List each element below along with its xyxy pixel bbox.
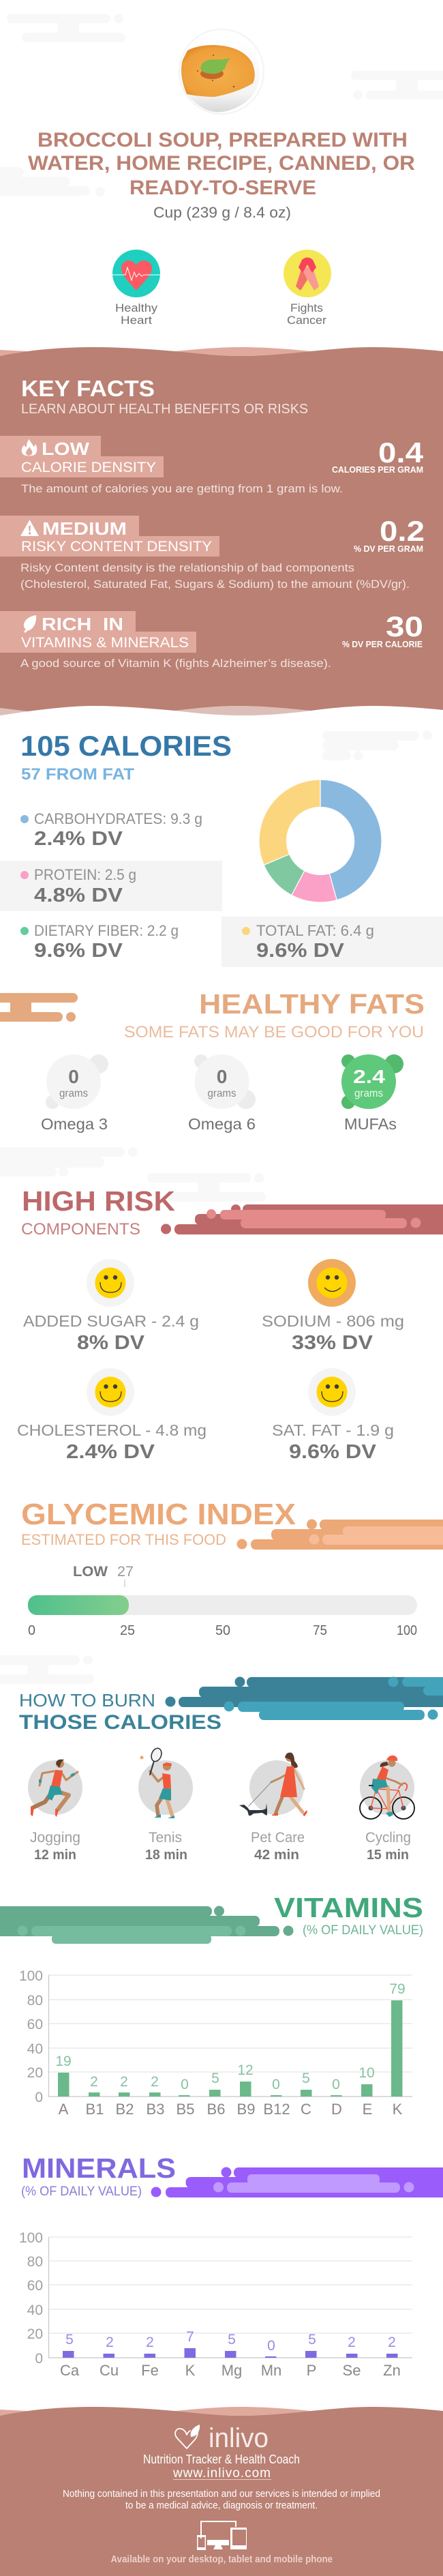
- gauge: glycemic index: LOW: [73, 1564, 108, 1580]
- risk: sodium: 33% DV: [292, 1332, 373, 1354]
- bar chart: vitamins: 100: [19, 1968, 43, 1984]
- activity: tennis: [138, 1747, 193, 1818]
- label: jogging: Jogging: [30, 1830, 80, 1846]
- label: tenis: Tenis: [149, 1830, 182, 1846]
- fat: mufas: MUFAs: [344, 1115, 397, 1133]
- icon: devices: [197, 2521, 247, 2550]
- bar chart: minerals: Mg: [222, 2362, 242, 2379]
- bar chart: vitamins: K: [393, 2101, 403, 2118]
- activity: cycling: [360, 1756, 414, 1819]
- icon: flame: [22, 439, 37, 456]
- fat: mufas: grams: [354, 1088, 383, 1099]
- bar chart: vitamins: 80: [27, 1993, 43, 2009]
- label: cycling: Cycling: [365, 1830, 411, 1846]
- heading: calories: 105 CALORIES: [20, 730, 232, 762]
- heading: minerals: MINERALS: [22, 2152, 176, 2184]
- gauge: glycemic index: 100: [397, 1623, 417, 1638]
- bar chart: minerals: 2: [388, 2335, 396, 2350]
- fact: calorie density: [0, 436, 424, 495]
- disclaimer: Nothing contained in this presentation and our services is intended or implied: [63, 2488, 380, 2500]
- bar chart: vitamins: 0: [35, 2090, 43, 2105]
- heading: high risk: HIGH RISK: [22, 1185, 175, 1217]
- gauge: glycemic index: 27: [117, 1564, 134, 1580]
- legend: carbohydrates: [20, 810, 202, 850]
- subheading: estimated for this food: ESTIMATED FOR THIS FOOD: [21, 1531, 226, 1548]
- availability note: Available on your desktop, tablet and mobile phone: [110, 2553, 333, 2565]
- cloud: vitamins: [0, 1906, 293, 1944]
- legend: carbohydrates: CARBOHYDRATES: 9.3 g: [34, 810, 202, 827]
- icon: fights cancer ribbon: [284, 250, 331, 297]
- fat: omega 3: grams: [59, 1088, 88, 1099]
- bar chart: minerals: 2: [348, 2335, 356, 2350]
- bar chart: minerals: P: [307, 2362, 316, 2379]
- bar chart: vitamins: 79: [389, 1981, 406, 1997]
- bar chart: vitamins: B3: [147, 2101, 164, 2118]
- fat: omega 6: 0: [217, 1066, 227, 1087]
- subheading: minerals percent of daily value: (% OF DAILY VALUE): [21, 2185, 142, 2199]
- bar chart: vitamins: C: [301, 2101, 311, 2118]
- risk: added sugar: ADDED SUGAR - 2.4 g: [23, 1312, 199, 1330]
- bar chart: vitamins: 12: [237, 2062, 254, 2078]
- risk: added sugar: 8% DV: [77, 1332, 145, 1354]
- label: tenis: 18 min: [145, 1848, 187, 1863]
- bar chart: vitamins: 0: [332, 2077, 340, 2092]
- fact: rich in vitamins and minerals: [0, 610, 423, 670]
- bar chart: minerals: Fe: [141, 2362, 159, 2379]
- bar chart: vitamins: 2: [90, 2074, 98, 2090]
- legend: protein: 4.8% DV: [34, 885, 123, 906]
- activity: jogging: [28, 1760, 82, 1817]
- bar chart: vitamins: 5: [302, 2071, 310, 2086]
- icon: leaf: [24, 615, 36, 633]
- title: [28, 129, 415, 199]
- fat: omega 6: [188, 1054, 256, 1133]
- bar chart: vitamins: B6: [207, 2101, 225, 2118]
- fact: risky content density: % DV PER GRAM: [354, 544, 423, 554]
- label: fights cancer: [287, 301, 326, 327]
- fact: risky content density: 0.2: [380, 515, 425, 547]
- bar chart: vitamins: 60: [27, 2017, 43, 2032]
- heading: healthy fats: HEALTHY FATS: [199, 988, 425, 1020]
- label: tenis: [145, 1830, 187, 1863]
- risk: saturated fat: SAT. FAT - 1.9 g: [272, 1421, 394, 1439]
- disclaimer: to be a medical advice, diagnosis or treatment.: [125, 2500, 318, 2511]
- bar chart: vitamins: D: [331, 2101, 342, 2118]
- bar chart: vitamins: B2: [116, 2101, 134, 2118]
- bar chart: vitamins: B1: [86, 2101, 104, 2118]
- legend: total fat: 9.6% DV: [256, 940, 345, 962]
- bar chart: minerals: Cu: [100, 2362, 119, 2379]
- panel: key facts: [0, 347, 443, 715]
- bar chart: minerals: 80: [27, 2254, 43, 2270]
- gauge: glycemic index: 25: [120, 1623, 135, 1638]
- subheading: healthy fats: SOME FATS MAY BE GOOD FOR YOU: [124, 1023, 424, 1041]
- website link: www.inlivo.com: [172, 2466, 271, 2481]
- legend: protein: [0, 861, 222, 911]
- bar chart: vitamins: 10: [358, 2065, 375, 2081]
- heading: glycemic index: GLYCEMIC INDEX: [21, 1498, 296, 1531]
- label: healthy heart: Heart: [121, 314, 152, 327]
- fat: omega 3: [41, 1054, 108, 1133]
- bar chart: vitamins: A: [59, 2101, 69, 2118]
- fact: rich in vitamins and minerals: VITAMINS & MINERALS: [21, 635, 189, 651]
- legend: dietary fiber: DIETARY FIBER: 2.2 g: [34, 922, 179, 939]
- icon: healthy heart: [112, 250, 160, 297]
- fat: omega 3: Omega 3: [41, 1115, 108, 1133]
- food image: bowl of soup: [179, 29, 264, 114]
- bar chart: minerals: K: [185, 2362, 196, 2379]
- fat: omega 3: 0: [68, 1066, 79, 1087]
- subheading: components: COMPONENTS: [21, 1220, 140, 1239]
- risk: sodium: [262, 1259, 404, 1354]
- fact: rich in vitamins and minerals: A good source of Vitamin K (fights Alzheimer’s disease).: [20, 657, 331, 670]
- label: jogging: [30, 1830, 80, 1863]
- bar chart: minerals: Zn: [383, 2362, 401, 2379]
- title: WATER, HOME RECIPE, CANNED, OR: [28, 152, 415, 175]
- logo: inlivo: inlivo: [209, 2423, 269, 2453]
- fact: risky content density: (Cholesterol, Saturated Fat, Sugars & Sodium) to the amount (%DV/gr).: [20, 578, 410, 591]
- fact: risky content density: Risky Content density is the relationship of bad components: [20, 561, 354, 574]
- bar chart: minerals: 20: [27, 2326, 43, 2342]
- gauge: glycemic index: [28, 1564, 417, 1638]
- label: jogging: 12 min: [34, 1848, 76, 1863]
- bar chart: vitamins: 20: [27, 2065, 43, 2081]
- heading: how to burn those calories: [19, 1690, 222, 1734]
- cloud: glycemic index: [237, 1520, 443, 1550]
- risk: cholesterol: [17, 1368, 207, 1463]
- risk: cholesterol: CHOLESTEROL - 4.8 mg: [17, 1421, 207, 1439]
- serving size: Cup (239 g / 8.4 oz): [153, 204, 291, 221]
- label: pet care: [251, 1830, 305, 1863]
- fact: rich in vitamins and minerals: 30: [386, 610, 423, 642]
- legend: dietary fiber: 9.6% DV: [34, 940, 123, 962]
- cloud: how to burn: [165, 1676, 443, 1720]
- donut chart: macronutrients: [259, 780, 382, 902]
- fat: omega 6: Omega 6: [188, 1115, 256, 1133]
- bar chart: minerals: 5: [228, 2332, 236, 2348]
- bar chart: minerals: 5: [308, 2332, 316, 2348]
- tagline: Nutrition Tracker & Health Coach: [143, 2453, 300, 2466]
- bar chart: vitamins: 0: [272, 2077, 280, 2092]
- heading: how to burn those calories: HOW TO BURN: [19, 1690, 155, 1711]
- risk: cholesterol: 2.4% DV: [66, 1441, 155, 1463]
- bar chart: minerals: 2: [106, 2335, 114, 2350]
- bar chart: minerals: 5: [65, 2332, 74, 2348]
- legend: total fat: TOTAL FAT: 6.4 g: [256, 922, 374, 939]
- bar chart: vitamins: B9: [237, 2101, 255, 2118]
- label: cycling: 15 min: [367, 1848, 409, 1863]
- fact: calorie density: CALORIES PER GRAM: [332, 464, 423, 475]
- heading: vitamins: VITAMINS: [274, 1892, 423, 1923]
- bar chart: vitamins: B5: [177, 2101, 194, 2118]
- bar chart: vitamins: B12: [263, 2101, 290, 2118]
- fact: calorie density: CALORIE DENSITY: [21, 460, 156, 475]
- bar chart: minerals: 7: [186, 2329, 194, 2345]
- legend: total fat: [222, 917, 443, 967]
- bar chart: vitamins: 2: [120, 2074, 128, 2090]
- label: cycling: [365, 1830, 411, 1863]
- subheading: key facts: LEARN ABOUT HEALTH BENEFITS OR RISKS: [21, 401, 308, 417]
- activity: pet care: [239, 1753, 307, 1816]
- label: fights cancer: Fights: [290, 301, 323, 314]
- bar chart: minerals: Ca: [60, 2362, 80, 2379]
- legend: dietary fiber: [20, 922, 179, 962]
- label: pet care: Pet Care: [251, 1830, 305, 1846]
- risk: saturated fat: [272, 1368, 394, 1463]
- fact: calorie density: The amount of calories you are getting from 1 gram is low.: [21, 482, 343, 495]
- fat: mufas: 2.4: [353, 1066, 385, 1087]
- title: BROCCOLI SOUP, PREPARED WITH: [37, 129, 408, 151]
- gauge: glycemic index: 50: [215, 1623, 230, 1638]
- bar chart: vitamins: 19: [55, 2054, 72, 2069]
- risk: added sugar: [23, 1259, 199, 1354]
- label: fights cancer: Cancer: [287, 314, 326, 327]
- icon: warning: [20, 520, 39, 536]
- title: READY-TO-SERVE: [129, 177, 316, 199]
- heading: how to burn those calories: THOSE CALORIES: [19, 1711, 222, 1734]
- gauge: glycemic index: 75: [313, 1623, 327, 1638]
- bar chart: vitamins: 2: [151, 2074, 159, 2090]
- bar chart: vitamins: 40: [27, 2041, 43, 2057]
- cloud: healthy fats: [0, 993, 78, 1022]
- fact: rich in vitamins and minerals: RICH IN: [42, 614, 123, 634]
- label: healthy heart: Healthy: [115, 301, 158, 314]
- bar chart: minerals: 40: [27, 2303, 43, 2318]
- bar chart: vitamins: [19, 1968, 412, 2118]
- cloud: high risk: [161, 1204, 443, 1234]
- fact: rich in vitamins and minerals: % DV PER CALORIE: [342, 639, 423, 649]
- subheading: vitamins percent of daily value: (% OF DAILY VALUE): [303, 1923, 423, 1938]
- fat: mufas: [341, 1054, 403, 1133]
- fact: risky content density: RISKY CONTENT DENSITY: [21, 539, 212, 554]
- bar chart: vitamins: 5: [211, 2071, 219, 2086]
- panel: footer: [0, 2407, 443, 2576]
- fact: calorie density: 0.4: [378, 436, 424, 469]
- disclaimer: [63, 2488, 380, 2511]
- bar chart: minerals: 2: [146, 2335, 154, 2350]
- legend: protein: PROTEIN: 2.5 g: [34, 866, 136, 883]
- bar chart: minerals: Se: [343, 2362, 361, 2379]
- bar chart: minerals: 0: [267, 2338, 275, 2354]
- fact: calorie density: LOW: [42, 439, 90, 459]
- label: pet care: 42 min: [254, 1848, 299, 1863]
- risk: saturated fat: 9.6% DV: [289, 1441, 377, 1463]
- fat: omega 6: grams: [207, 1088, 236, 1099]
- bar chart: minerals: Mn: [261, 2362, 281, 2379]
- bar chart: vitamins: 0: [181, 2077, 189, 2092]
- bar chart: minerals: 60: [27, 2278, 43, 2294]
- legend: carbohydrates: 2.4% DV: [34, 828, 123, 850]
- label: healthy heart: [115, 301, 158, 327]
- risk: sodium: SODIUM - 806 mg: [262, 1312, 404, 1330]
- bar chart: minerals: [19, 2230, 412, 2379]
- fact: risky content density: [0, 515, 425, 591]
- bar chart: vitamins: E: [363, 2101, 372, 2118]
- gauge: glycemic index: 0: [28, 1623, 35, 1638]
- fact: risky content density: MEDIUM: [42, 518, 127, 539]
- background clouds: [0, 14, 443, 1684]
- heading: key facts: KEY FACTS: [21, 376, 155, 401]
- cloud: minerals: [151, 2167, 443, 2197]
- bar chart: minerals: 100: [19, 2230, 43, 2246]
- bar chart: minerals: 0: [35, 2351, 43, 2367]
- subheading: calories from fat: 57 FROM FAT: [21, 765, 134, 784]
- logo: inlivo: [175, 2423, 269, 2453]
